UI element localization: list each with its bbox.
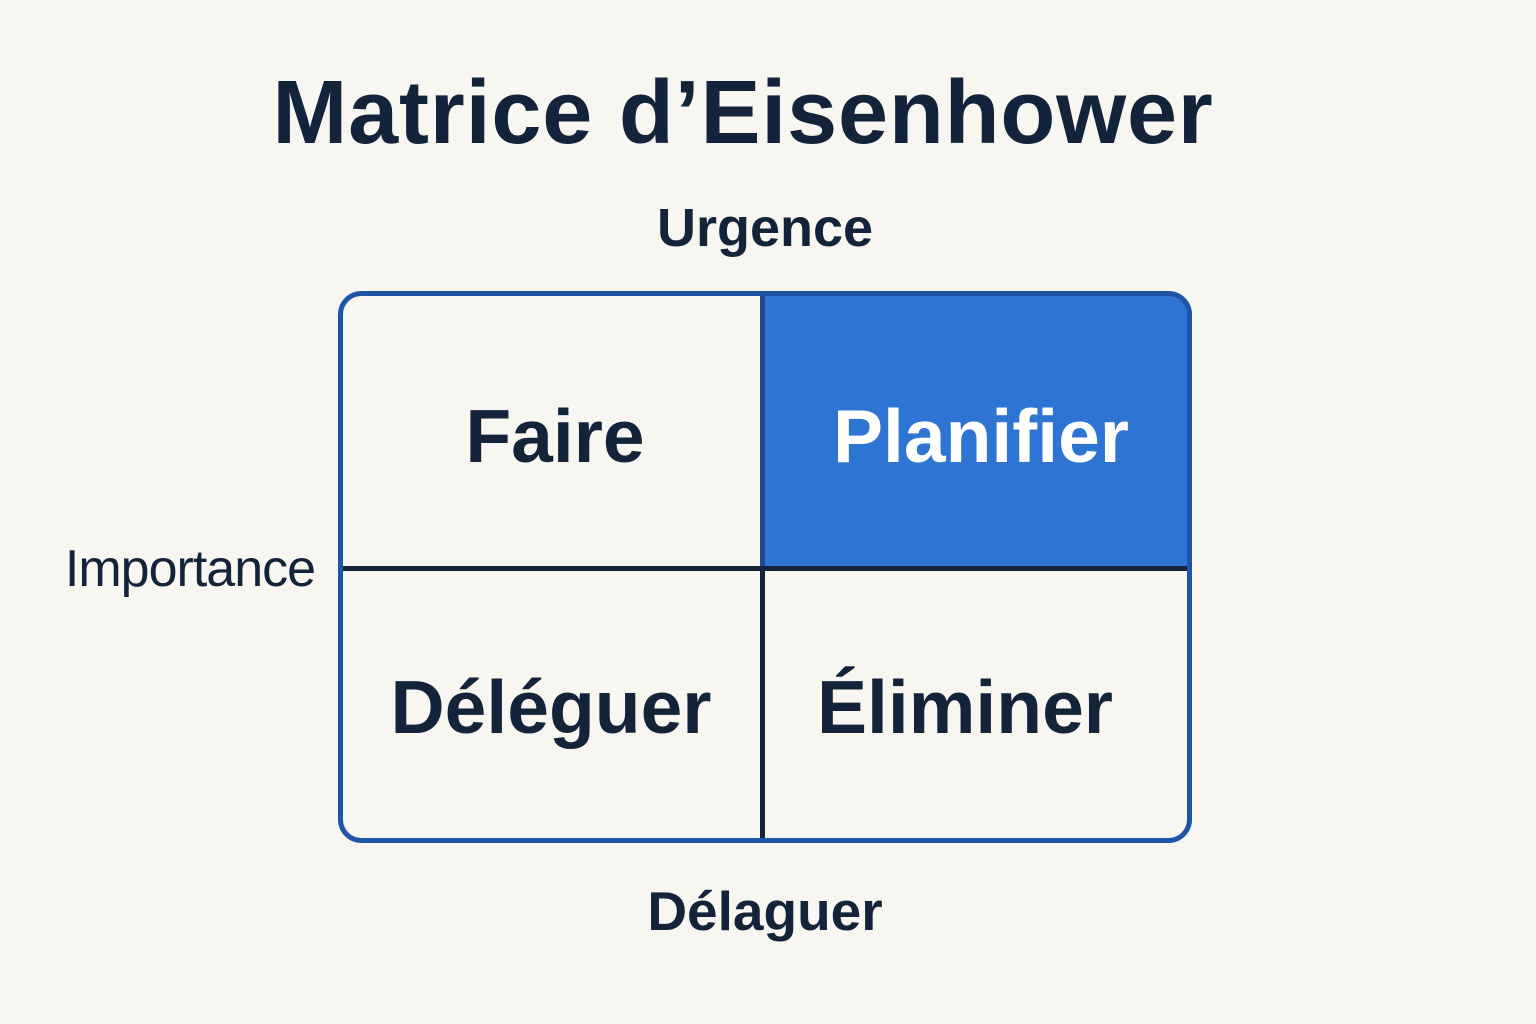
title: Matrice d’Eisenhower [272, 63, 1214, 163]
matrix grid [340, 294, 1190, 840]
frame [340, 294, 1190, 840]
cell: Planifier background [762, 294, 1189, 569]
axis label: Importance: Importance [65, 540, 315, 598]
dividers [760, 296, 765, 568]
quadrant: Planifier: Planifier [833, 394, 1129, 478]
bottom label: Délaguer: Délaguer [647, 880, 883, 942]
quadrant: Éliminer: Éliminer [817, 665, 1113, 749]
axis label: Urgence: Urgence [657, 198, 873, 258]
quadrant: Faire: Faire [465, 394, 645, 478]
quadrant: Déléguer: Déléguer [391, 665, 711, 749]
